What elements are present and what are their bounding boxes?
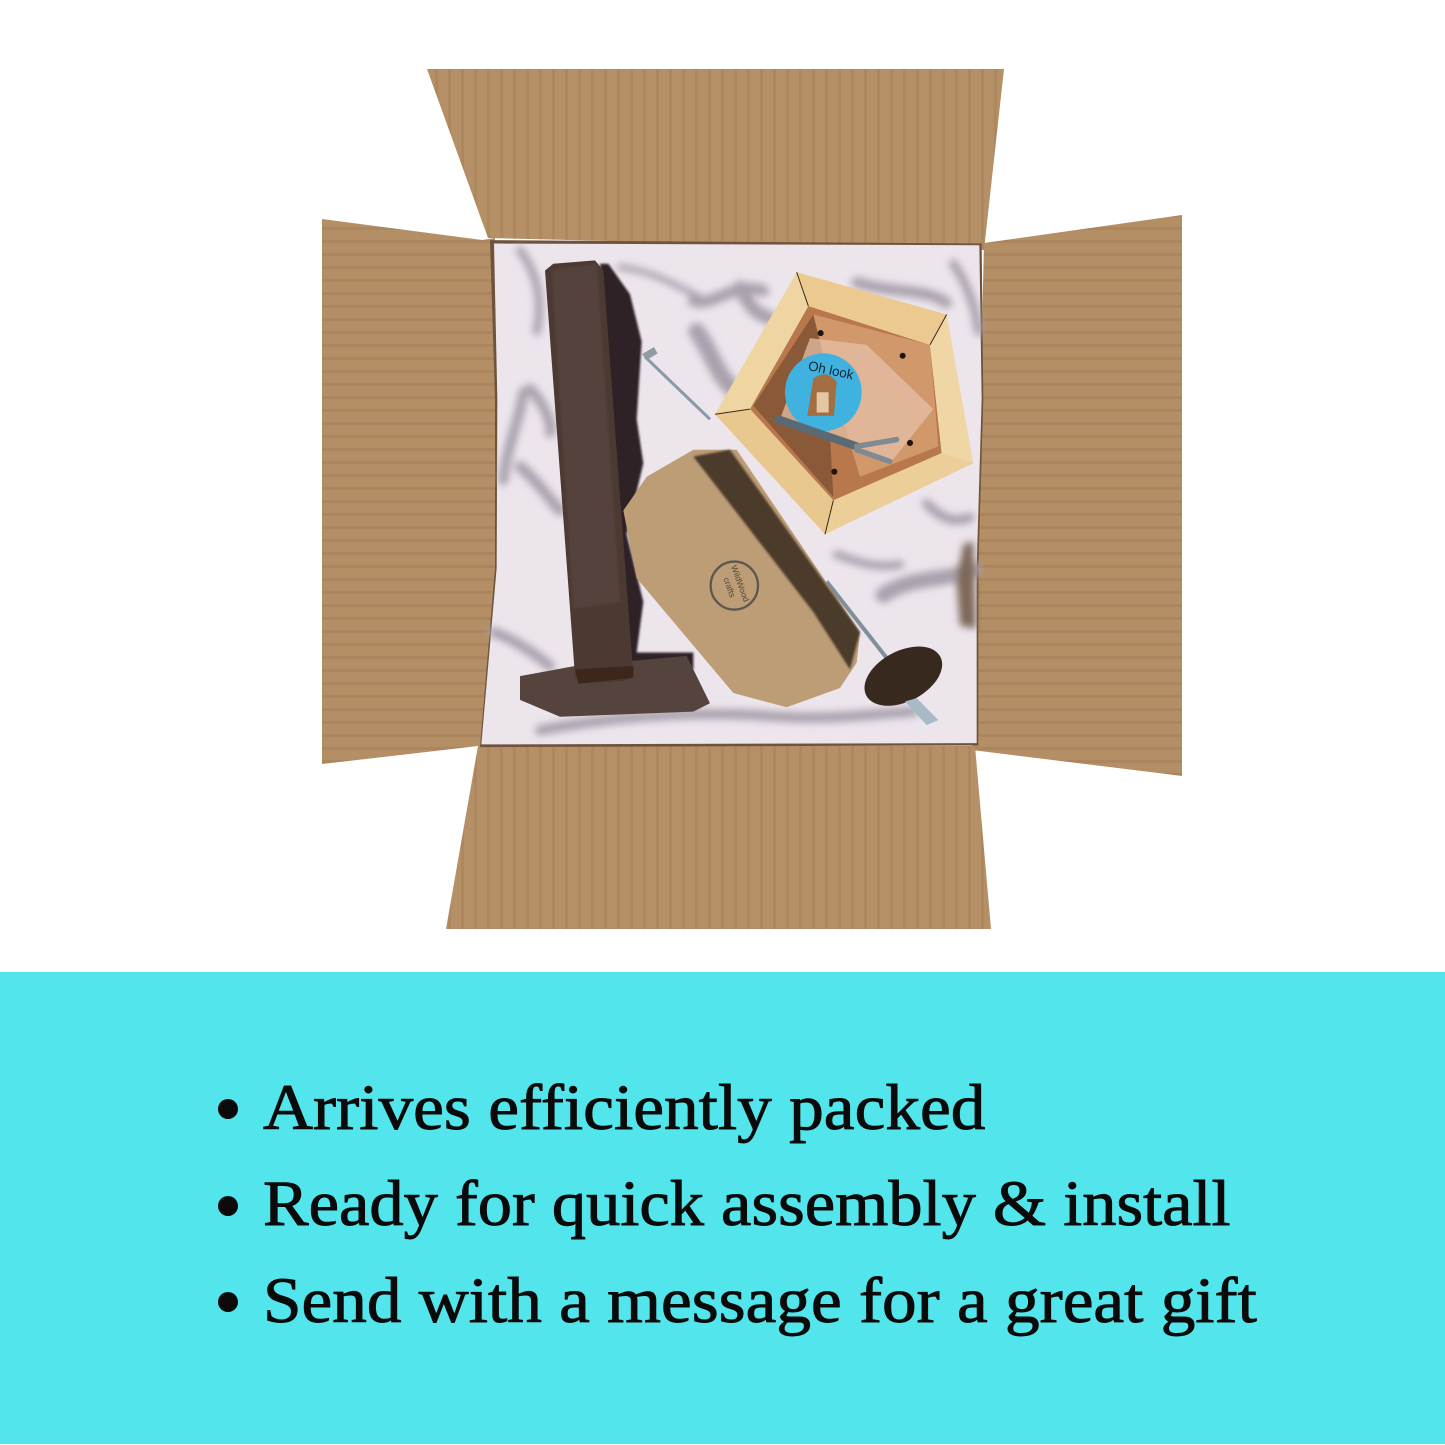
box flap: bottom xyxy=(446,746,991,929)
screws xyxy=(778,419,897,462)
kraft paper parcel xyxy=(623,450,860,707)
panel: turquoise benefits band xyxy=(0,972,1445,1444)
dark shadow beside post xyxy=(600,264,693,669)
box flap: top xyxy=(427,69,1004,250)
box flap: right xyxy=(972,215,1182,776)
wooden post, dark brown xyxy=(545,260,633,684)
text: bullet 2: Ready for quick assembly & install xyxy=(263,1168,1231,1240)
text: bullet 3: Send with a message for a great gift xyxy=(263,1265,1257,1337)
photo: open cardboard box with packed kit xyxy=(322,69,1182,929)
bullet 1 xyxy=(218,1099,238,1119)
round stamp xyxy=(711,562,758,610)
bullet 3 xyxy=(218,1292,238,1312)
screw holes xyxy=(818,330,913,475)
sticker: Oh look xyxy=(807,358,855,383)
threaded rods and knob xyxy=(642,347,952,725)
box flap: left xyxy=(322,219,495,764)
box interior contents xyxy=(480,240,983,747)
pentagon wooden frame xyxy=(623,272,973,707)
text: bullet 1: Arrives efficiently packed xyxy=(263,1072,985,1144)
wooden base, dark brown xyxy=(520,656,710,717)
tissue paper xyxy=(480,240,983,747)
round stamp: crafts xyxy=(721,576,738,599)
plastic hardware bag xyxy=(780,338,933,463)
sticker xyxy=(785,353,862,431)
bullet 2 xyxy=(218,1196,238,1216)
round stamp: WildWood xyxy=(729,564,751,603)
